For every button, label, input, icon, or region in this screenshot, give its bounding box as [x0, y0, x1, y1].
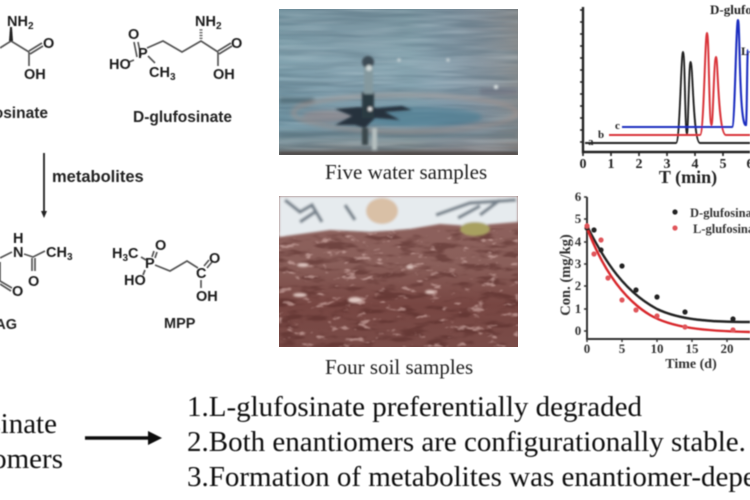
structure: D-glufosinate: O: [231, 36, 242, 52]
label: metabolites: metabolites: [52, 168, 144, 186]
x axis title: Time (d): [665, 357, 717, 372]
y axis labels: 6: [575, 189, 582, 204]
y axis labels: 5: [575, 211, 582, 226]
structure: D-glufosinate: NH: [195, 14, 216, 30]
structure: MPP: C: [196, 266, 207, 282]
structure: MPP: OH: [196, 289, 218, 305]
label: D-glufosinate: D-glufosinate: [133, 109, 232, 126]
axis tick labels: [580, 157, 750, 172]
axis tick labels: 2: [636, 157, 642, 172]
trace a: black: [585, 52, 750, 143]
structure: NAG: CH: [46, 245, 67, 261]
structure: MPP: H: [112, 246, 122, 262]
x axis labels: 20: [720, 341, 734, 356]
photo: water droplet: [279, 9, 518, 155]
structure: D-glufosinate: 2: [216, 21, 222, 32]
y axis labels: [575, 189, 582, 338]
points: D-glufosinate: [584, 225, 736, 322]
structure: L-glufosinate: 2: [28, 21, 34, 32]
y axis labels: 1: [575, 301, 581, 316]
points: L-glufosinate: [584, 223, 736, 333]
axis title: T (min): [659, 167, 717, 188]
axis tick labels: 0: [580, 157, 586, 172]
conclusions: [187, 391, 750, 493]
structure: D-glufosinate: 3: [170, 72, 176, 83]
curve: L-glufosinate: [587, 228, 750, 332]
arrow: to conclusions: [85, 431, 162, 445]
trace labels: a: [588, 136, 594, 148]
structure: MPP: 3: [122, 253, 128, 264]
x axis labels: [584, 341, 734, 356]
chart: degradation curves: [558, 189, 750, 372]
arrow: to metabolites: [41, 153, 47, 218]
y axis labels: 0: [575, 323, 581, 338]
structure: NAG: N: [13, 245, 23, 261]
trace labels: b: [598, 129, 604, 141]
label: MPP: MPP: [164, 316, 196, 332]
trace labels: c: [615, 120, 620, 132]
structure: MPP: [112, 238, 220, 305]
chart: chromatogram: [580, 2, 750, 188]
structure: MPP: O: [155, 238, 166, 254]
y axis labels: 2: [575, 278, 581, 293]
x axis labels: 15: [686, 341, 699, 356]
trace labels: [588, 2, 750, 148]
structure: D-glufosinate: P: [138, 46, 148, 62]
structure: D-glufosinate: CH: [149, 65, 170, 81]
structure: NAG: 3: [67, 252, 73, 263]
panel: chemical structures: [0, 14, 242, 333]
axis tick labels: 1: [608, 157, 614, 172]
axis tick labels: 3: [664, 157, 670, 172]
x axis labels: 10: [650, 341, 664, 356]
y axis title: Con. (mg/kg): [558, 234, 574, 316]
curve: D-glufosinate: [587, 226, 750, 322]
structure: MPP: O: [209, 251, 220, 267]
structure: D-glufosinate: [109, 14, 242, 83]
structure: NAG: [0, 231, 73, 300]
heading: glufosinate enantiomers: [0, 408, 63, 475]
photo: soil: [279, 196, 518, 347]
structure: MPP: C: [128, 246, 139, 262]
structure: MPP: P: [145, 256, 155, 272]
axis tick labels: 4: [692, 157, 698, 172]
trace b: red: [609, 33, 750, 135]
y axis labels: 4: [575, 234, 582, 249]
conclusions: 2.Both enantiomers are configurationally stable.: [187, 426, 746, 458]
structure: L-glufosinate: NH: [7, 14, 28, 30]
x axis labels: 5: [619, 341, 626, 356]
structure: D-glufosinate: O: [128, 27, 139, 43]
caption: soil: Four soil samples: [325, 355, 473, 379]
structure: NAG: O: [28, 274, 39, 290]
structure: NAG: O: [12, 284, 23, 300]
x axis labels: 0: [584, 341, 590, 356]
structure: D-glufosinate: HO: [109, 57, 131, 73]
structure: D-glufosinate: OH: [213, 67, 235, 83]
legend: [672, 206, 750, 236]
structure: L-glufosinate: [0, 14, 54, 83]
structure: MPP: HO: [124, 273, 146, 289]
conclusions: 1.L-glufosinate preferentially degraded: [187, 391, 642, 423]
axis tick labels: 5: [720, 157, 726, 172]
caption: water: Five water samples: [325, 160, 487, 184]
trace c: blue: [622, 20, 748, 127]
structure: L-glufosinate: OH: [24, 67, 46, 83]
structure: NAG: H: [13, 231, 23, 247]
y axis labels: 3: [575, 256, 582, 271]
structure: L-glufosinate: O: [43, 36, 54, 52]
